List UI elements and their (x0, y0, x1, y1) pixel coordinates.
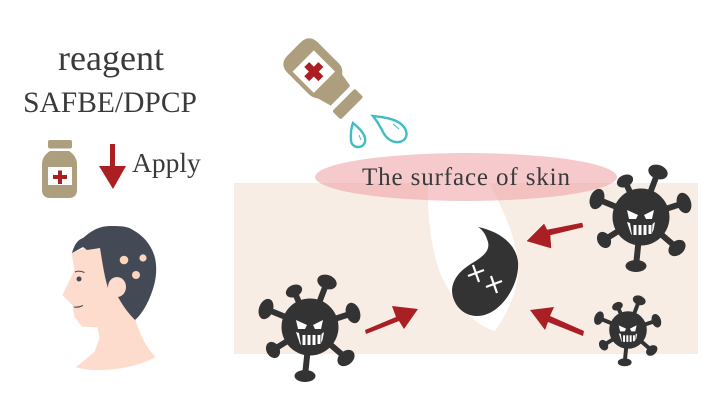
subtitle: SAFBE/DPCP: SAFBE/DPCP (23, 87, 197, 119)
virus: upper right (587, 162, 694, 272)
ear (108, 277, 126, 297)
hair follicle (428, 180, 518, 331)
damaged cell (452, 227, 518, 316)
icon: reagent drops (351, 116, 406, 147)
title: reagent: reagent (58, 38, 164, 78)
arrow: right virus to cell (527, 223, 583, 248)
label: apply: Apply (132, 147, 201, 178)
virus: lower right (592, 294, 663, 366)
hair loss spots (120, 254, 147, 279)
cell cross marks (468, 265, 502, 293)
illustration: head (63, 226, 156, 370)
surface of skin ellipse (315, 153, 617, 201)
hair (72, 226, 156, 320)
arrow: left virus to cell (365, 306, 418, 334)
arrow: lower virus to cell (530, 307, 584, 336)
label: the surface of skin: The surface of skin (362, 164, 570, 191)
arrow: apply down (99, 144, 126, 189)
eye (76, 276, 82, 282)
virus: lower left (256, 272, 363, 382)
panel: skin block (234, 183, 698, 354)
icon: small bottle (42, 140, 77, 198)
icon: tilted bottle (279, 34, 368, 123)
